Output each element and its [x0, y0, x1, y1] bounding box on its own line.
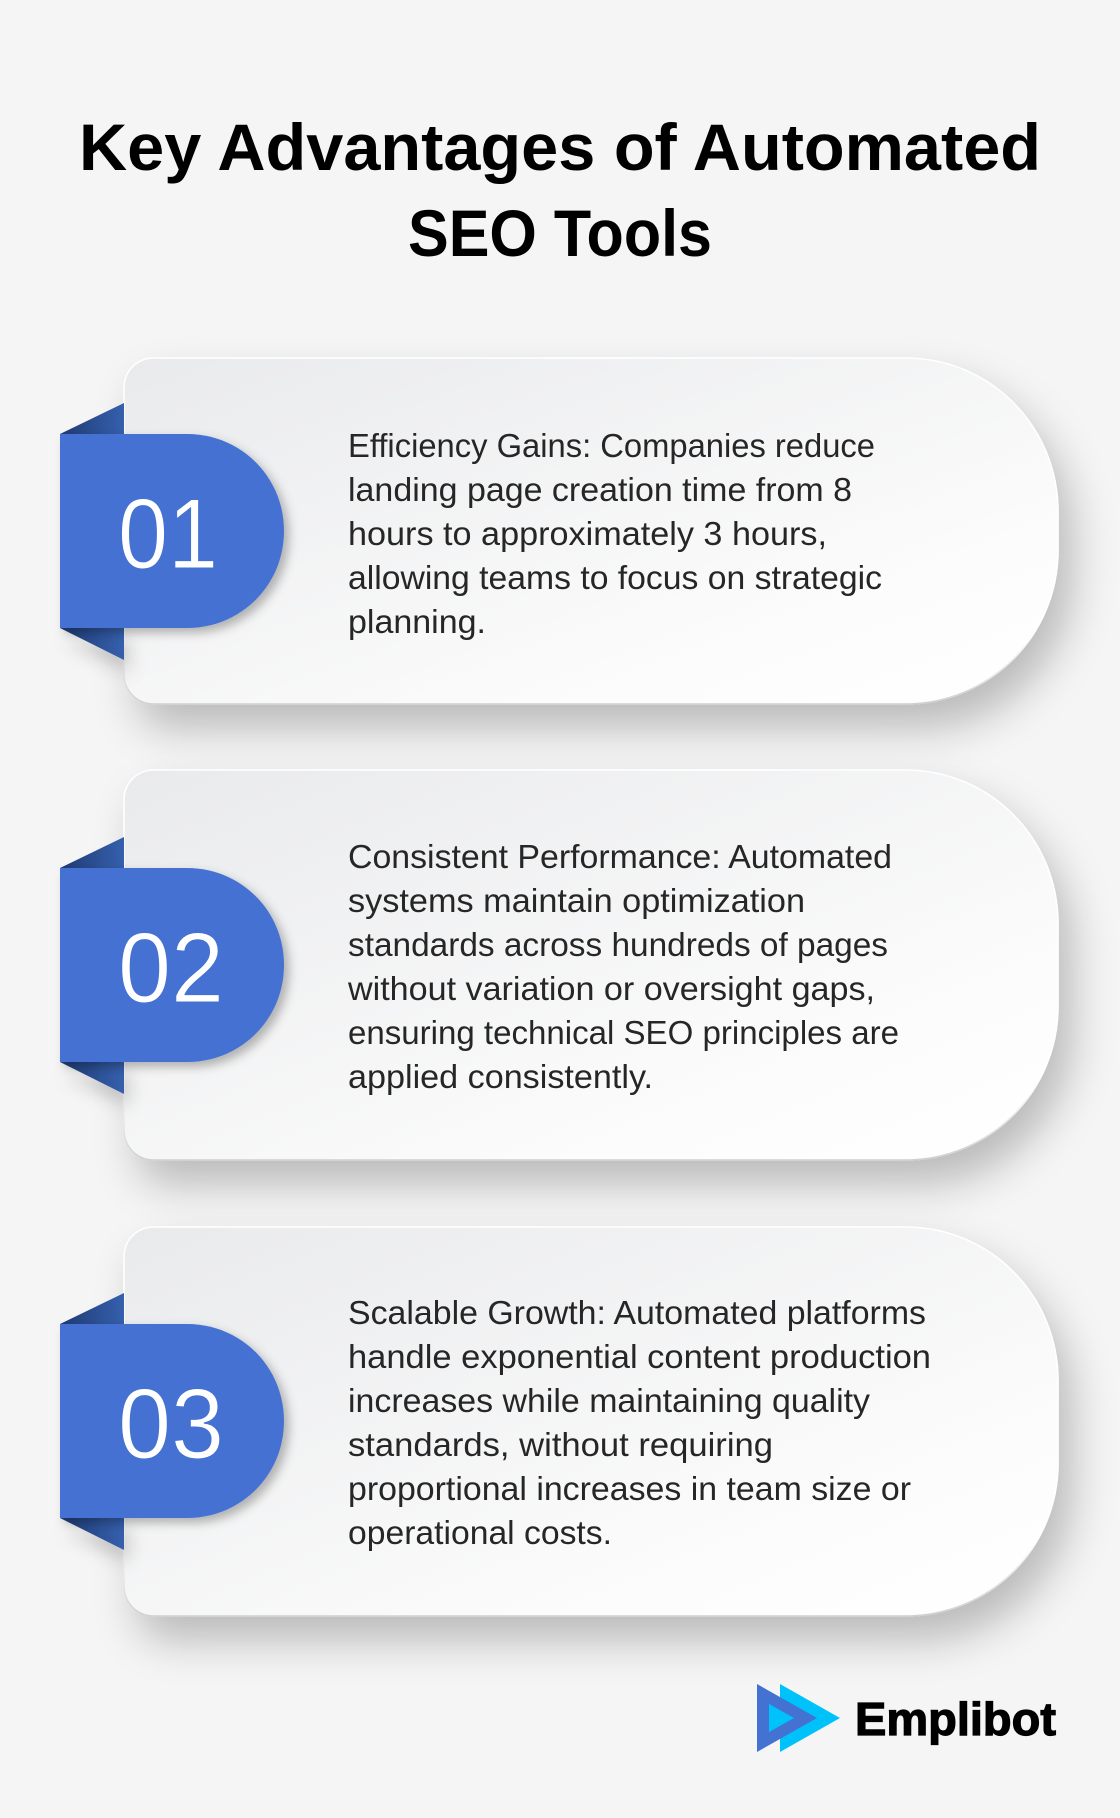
- number tab 3: [60, 1324, 284, 1518]
- number tab 1: [60, 434, 284, 628]
- number 03: 03: [118, 1368, 224, 1479]
- body text 1: allowing teams to focus on strategic: [348, 559, 882, 596]
- body text 3: [348, 1294, 931, 1551]
- body text 2: systems maintain optimization: [348, 882, 805, 919]
- body text 1: [348, 427, 882, 640]
- number tab 2: [60, 868, 284, 1062]
- body text 1: Efficiency Gains: Companies reduce: [348, 427, 875, 464]
- body text 1: planning.: [348, 603, 486, 640]
- body text 2: applied consistently.: [348, 1058, 653, 1095]
- body text 3: Scalable Growth: Automated platforms: [348, 1294, 926, 1331]
- logo wordmark: Emplibot: [855, 1693, 1056, 1745]
- number flaps 2: [60, 837, 124, 1094]
- body text 2: standards across hundreds of pages: [348, 926, 888, 963]
- body text 2: without variation or oversight gaps,: [347, 970, 875, 1007]
- body text 1: hours to approximately 3 hours,: [348, 515, 827, 552]
- card background 2: [124, 770, 1058, 1160]
- number 02: 02: [118, 912, 224, 1023]
- title: SEO Tools: [408, 196, 712, 270]
- icon: play triangles: [757, 1684, 840, 1752]
- body text 2: [347, 838, 899, 1095]
- card background 3: [124, 1227, 1058, 1616]
- number flaps 1: [60, 403, 124, 660]
- body text 3: operational costs.: [348, 1514, 612, 1551]
- title: Key Advantages of Automated: [79, 110, 1041, 184]
- panel: scalable growth: [60, 1227, 1058, 1616]
- panel: consistent performance: [60, 770, 1058, 1160]
- card background 1: [124, 358, 1058, 704]
- title: [79, 110, 1041, 270]
- body text 3: proportional increases in team size or: [348, 1470, 911, 1507]
- body text 3: standards, without requiring: [348, 1426, 773, 1463]
- body text 3: handle exponential content production: [348, 1338, 931, 1375]
- logo: Emplibot: [757, 1684, 1056, 1752]
- body text 2: Consistent Performance: Automated: [348, 838, 892, 875]
- body text 1: landing page creation time from 8: [348, 471, 852, 508]
- panel: efficiency gains: [60, 358, 1058, 704]
- body text 2: ensuring technical SEO principles are: [348, 1014, 899, 1051]
- number 01: 01: [118, 478, 218, 589]
- number flaps 3: [60, 1293, 124, 1550]
- body text 3: increases while maintaining quality: [348, 1382, 871, 1419]
